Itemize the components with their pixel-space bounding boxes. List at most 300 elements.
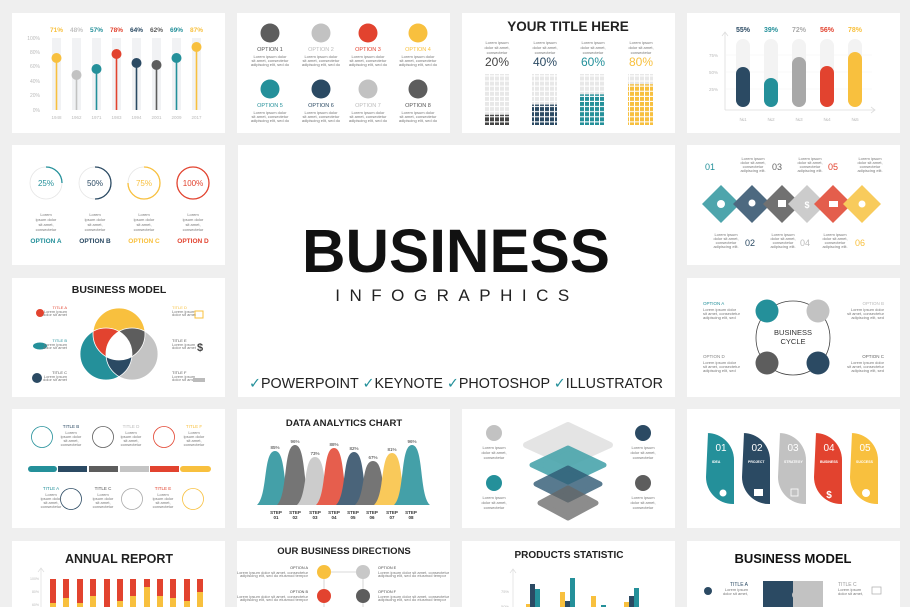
panel: business directions: Lorem ipsum dolor sit amet, consectetur — [378, 594, 450, 599]
panel: pill steps: 04 — [823, 443, 835, 454]
panel: data analytics chart: 67% — [368, 455, 378, 460]
panel: progress circles: 50% — [87, 179, 103, 188]
panel: business model venn: dolor sit amet — [172, 312, 197, 317]
panel: diamond steps: 01 — [705, 162, 715, 172]
panel: waffle percentages — [462, 13, 675, 133]
panel: diamond steps: 05 — [828, 162, 838, 172]
panel: progress circles: 25% — [38, 179, 54, 188]
panel: data analytics chart: STEP — [270, 510, 282, 515]
panel: timeline: consectetur — [41, 504, 62, 509]
panel: pill steps: 01 — [715, 443, 727, 454]
panel: options grid: OPTION 1 — [257, 47, 283, 53]
panel: waffle percentages: Lorem ipsum — [533, 40, 557, 45]
panel: diamond steps: consectetur — [716, 240, 737, 245]
panel: timeline: consectetur — [61, 442, 82, 447]
panel: pill steps: PROJECT — [748, 460, 765, 464]
panel: diamond steps: adipiscing elit. — [713, 244, 739, 249]
panel: lollipop chart: 1971 — [91, 115, 102, 120]
panel: timeline: sit amet, — [155, 500, 171, 505]
panel: progress circles — [12, 145, 225, 265]
panel: data analytics chart: 81% — [387, 447, 397, 452]
panel: timeline: ipsum dolor — [41, 496, 62, 501]
panel: pill steps: $ — [826, 490, 832, 501]
panel: progress circles: OPTION C — [128, 238, 160, 245]
panel: business cycle: sit amet, consectetur — [847, 311, 885, 316]
panel: timeline: Lorem — [97, 492, 109, 497]
panel: business model venn: TITLE B — [52, 338, 67, 343]
panel: rounded bar chart: 55% — [736, 27, 751, 34]
panel: annual report — [12, 541, 225, 607]
panel: timeline: sit amet, — [43, 500, 59, 505]
panel: data analytics chart: 01 — [273, 515, 279, 520]
panel: progress circles: consectetur — [85, 227, 106, 232]
panel: options grid: adipiscing elit, sed do — [302, 118, 341, 123]
panel: business cycle: OPTION D — [703, 354, 726, 359]
panel: business directions: adipiscing elit, sed do eiusmod tempor — [378, 597, 447, 602]
panel: diamond steps: Lorem ipsum — [823, 232, 847, 237]
panel: business model venn: $ — [197, 342, 203, 354]
panel: diamond steps: consectetur — [743, 164, 764, 169]
panel: rounded bar chart: 25% — [709, 87, 718, 92]
panel: waffle percentages: consectetur — [583, 50, 604, 55]
panel: options grid: OPTION 8 — [405, 103, 431, 109]
panel: data analytics chart: 96% — [407, 439, 417, 444]
panel: diamond steps: consectetur — [860, 164, 881, 169]
panel: data analytics chart: STEP — [366, 510, 378, 515]
panel: business model venn: Lorem ipsum — [44, 342, 68, 347]
panel: waffle percentages: consectetur — [631, 50, 652, 55]
panel: layers: consectetur — [484, 505, 505, 510]
panel: options grid: sit amet, consectetur — [350, 114, 387, 119]
panel: data analytics chart: 04 — [331, 515, 337, 520]
panel: business model venn: dolor sit amet — [172, 377, 197, 382]
panel: data analytics chart: STEP — [309, 510, 321, 515]
panel: options grid: adipiscing elit, sed do — [251, 118, 290, 123]
panel: diamond steps: dolor sit amet, — [740, 160, 766, 165]
panel: progress circles: OPTION A — [30, 238, 62, 245]
panel: diamond steps: Lorem ipsum — [798, 156, 822, 161]
panel: progress circles: Lorem — [138, 212, 150, 217]
panel: waffle percentages: consectetur — [487, 50, 508, 55]
panel: business cycle: adipiscing elit, sed — [703, 315, 736, 320]
panel: data analytics chart: 02 — [292, 515, 298, 520]
panel: progress circles: 75% — [136, 179, 152, 188]
panel: progress circles: consectetur — [36, 227, 57, 232]
panel: diamond steps: Lorem ipsum — [858, 156, 882, 161]
panel: rounded bar chart: 78% — [848, 27, 863, 34]
panel: diamond steps: consectetur — [773, 240, 794, 245]
panel: diamond steps: adipiscing elit. — [857, 168, 883, 173]
panel: progress circles: sit amet, — [38, 222, 54, 227]
subtitle: INFOGRAPHICS — [335, 286, 579, 305]
panel: options grid: Lorem ipsum dolor — [304, 54, 338, 59]
panel: diamond steps: dolor sit amet, — [797, 160, 823, 165]
panel: timeline: ipsum dolor — [153, 496, 174, 501]
panel: progress circles: Lorem — [89, 212, 101, 217]
panel: waffle percentages: 40% — [533, 55, 557, 69]
panel: progress circles: sit amet, — [87, 222, 103, 227]
panel: diamond steps: adipiscing elit. — [797, 168, 823, 173]
panel: business directions: OPTION E — [378, 566, 397, 570]
panel: progress circles: consectetur — [134, 227, 155, 232]
panel: diamond steps: 04 — [800, 238, 810, 248]
panel: progress circles: ipsum dolor — [183, 217, 204, 222]
panel: options grid: Lorem ipsum dolor — [351, 110, 385, 115]
panel: layers — [462, 409, 675, 528]
panel: business model venn: Lorem ipsum — [172, 342, 196, 347]
panel: diamond steps: dolor sit amet, — [857, 160, 883, 165]
panel: data analytics chart: STEP — [328, 510, 340, 515]
panel: business directions: adipiscing elit, sed do eiusmod tempor — [240, 573, 309, 578]
panel: diamond steps — [687, 145, 900, 265]
panel: timeline: Lorem — [157, 492, 169, 497]
panel: options grid: sit amet, consectetur — [400, 58, 437, 63]
panel: progress circles: OPTION D — [177, 238, 209, 245]
panel: diamond steps: adipiscing elit. — [822, 244, 848, 249]
panel: progress circles: ipsum dolor — [85, 217, 106, 222]
panel: layers: Lorem ipsum — [482, 445, 506, 450]
panel: business model puzzle: Lorem ipsum — [725, 587, 749, 592]
panel: options grid: sit amet, consectetur — [350, 58, 387, 63]
panel: waffle percentages: 60% — [581, 55, 605, 69]
panel: business cycle: Lorem ipsum dolor — [703, 360, 737, 365]
panel: waffle percentages: dolor sit amet, — [580, 45, 606, 50]
panel: progress circles: Lorem — [187, 212, 199, 217]
panel: timeline: TITLE B — [63, 424, 79, 429]
panel: lollipop chart: 87% — [190, 27, 203, 34]
panel: business directions: Lorem ipsum dolor sit amet, consectetur — [237, 570, 309, 575]
panel: business model venn: dolor sit amet — [43, 377, 68, 382]
panel: data analytics chart: STEP — [289, 510, 301, 515]
panel: data analytics chart: STEP — [405, 510, 417, 515]
panel: timeline: ipsum dolor — [93, 496, 114, 501]
panel: rounded bar chart: №4 — [823, 117, 831, 122]
panel: business cycle: OPTION B — [862, 301, 884, 306]
panel: options grid: adipiscing elit, sed do — [399, 118, 438, 123]
panel: lollipop chart: 1962 — [71, 115, 82, 120]
panel: lollipop chart: 2001 — [151, 115, 162, 120]
panel: options grid: Lorem ipsum dolor — [401, 110, 435, 115]
panel: progress circles: sit amet, — [136, 222, 152, 227]
panel: options grid: Lorem ipsum dolor — [401, 54, 435, 59]
panel: lollipop chart: 1994 — [131, 115, 142, 120]
panel: business model venn — [12, 278, 225, 397]
panel: data analytics chart: 73% — [310, 451, 320, 456]
panel: progress circles: Lorem — [40, 212, 52, 217]
panel: business model venn: TITLE D — [172, 305, 187, 310]
panel: annual report: 60% — [32, 603, 39, 607]
panel: business model puzzle — [687, 541, 900, 607]
panel: rounded bar chart: 50% — [709, 70, 718, 75]
panel: waffle percentages: Lorem ipsum — [581, 40, 605, 45]
panel: pill steps: 03 — [787, 443, 799, 454]
panel: lollipop chart: 71% — [50, 27, 63, 34]
panel: options grid: adipiscing elit, sed do — [251, 62, 290, 67]
panel: business model venn: TITLE E — [172, 338, 187, 343]
panel: layers: consectetur — [633, 455, 654, 460]
panel: business model venn: Lorem ipsum — [44, 309, 68, 314]
title: BUSINESS — [302, 217, 610, 285]
panel: options grid: OPTION 3 — [355, 47, 381, 53]
panel: timeline: TITLE A — [43, 486, 59, 491]
panel: timeline: sit amet, — [95, 500, 111, 505]
panel: business directions: adipiscing elit, sed do eiusmod tempor — [240, 597, 309, 602]
panel: lollipop chart: 2009 — [171, 115, 182, 120]
panel: business model venn: dolor sit amet — [43, 312, 68, 317]
panel: data analytics chart: DATA ANALYTICS CHART — [286, 418, 402, 429]
panel: annual report: ANNUAL REPORT — [65, 552, 173, 566]
panel: business cycle: sit amet, consectetur — [847, 364, 885, 369]
panel: rounded bar chart: 72% — [792, 27, 807, 34]
panel: layers: consectetur — [633, 505, 654, 510]
panel: business cycle: sit amet, consectetur — [703, 311, 741, 316]
panel: data analytics chart: 03 — [312, 515, 318, 520]
panel: rounded bar chart: 39% — [764, 27, 779, 34]
panel: options grid: sit amet, consectetur — [252, 58, 289, 63]
panel: timeline: Lorem — [65, 430, 77, 435]
panel: timeline: Lorem — [125, 430, 137, 435]
panel: options grid: Lorem ipsum dolor — [253, 110, 287, 115]
panel: rounded bar chart: №3 — [795, 117, 803, 122]
panel: business cycle: OPTION A — [703, 301, 724, 306]
panel: timeline: sit amet, — [186, 438, 202, 443]
panel: options grid: Lorem ipsum dolor — [351, 54, 385, 59]
panel: annual report: 100% — [30, 577, 39, 581]
panel: business cycle: adipiscing elit, sed — [703, 368, 736, 373]
panel: rounded bar chart: 75% — [709, 53, 718, 58]
panel: layers: Lorem ipsum — [631, 495, 655, 500]
panel: layers: Lorem ipsum — [482, 495, 506, 500]
panel: lollipop chart: 57% — [90, 27, 103, 34]
panel: business model venn: Lorem ipsum — [172, 374, 196, 379]
panel: lollipop chart: 78% — [110, 27, 123, 34]
panel: business directions — [237, 541, 450, 607]
panel: lollipop chart: 62% — [150, 27, 163, 34]
panel: pill steps: STRATEGY — [784, 460, 803, 464]
software list: ✓POWERPOINT ✓KEYNOTE ✓PHOTOSHOP ✓ILLUSTRATOR — [249, 376, 663, 392]
panel: business model venn: Lorem ipsum — [172, 309, 196, 314]
panel: progress circles: ipsum dolor — [36, 217, 57, 222]
panel: diamond steps: dolor sit amet, — [713, 236, 739, 241]
panel: timeline: TITLE F — [186, 424, 202, 429]
panel: timeline: TITLE E — [155, 486, 171, 491]
panel: business model venn: Lorem ipsum — [44, 374, 68, 379]
panel: diamond steps: 02 — [745, 238, 755, 248]
panel: data analytics chart: 85% — [270, 445, 280, 450]
panel: diamond steps: adipiscing elit. — [770, 244, 796, 249]
panel: business cycle: OPTION C — [862, 354, 885, 359]
panel: waffle percentages: Lorem ipsum — [629, 40, 653, 45]
panel: diamond steps: dolor sit amet, — [770, 236, 796, 241]
panel: business cycle: adipiscing elit, sed — [851, 315, 884, 320]
panel: diamond steps: Lorem ipsum — [714, 232, 738, 237]
panel: rounded bar chart: №2 — [767, 117, 775, 122]
panel: options grid: OPTION 7 — [355, 103, 381, 109]
panel: products statistic — [462, 541, 675, 607]
panel: lollipop chart — [12, 13, 225, 133]
panel: data analytics chart: STEP — [386, 510, 398, 515]
panel: timeline: consectetur — [121, 442, 142, 447]
panel: data analytics chart: 05 — [350, 515, 356, 520]
panel: progress circles: 100% — [183, 179, 203, 188]
panel: timeline: consectetur — [184, 442, 205, 447]
panel: rounded bar chart: 56% — [820, 27, 835, 34]
panel: data analytics chart: 07 — [389, 515, 395, 520]
panel: timeline: Lorem — [45, 492, 57, 497]
panel: business cycle: adipiscing elit, sed — [851, 368, 884, 373]
panel: waffle percentages: dolor sit amet, — [484, 45, 510, 50]
panel: diamond steps: consectetur — [825, 240, 846, 245]
panel: pill steps: BUSINESS — [820, 460, 839, 464]
panel: business model puzzle: Lorem ipsum — [838, 587, 862, 592]
panel: pill steps: SUCCESS — [856, 460, 874, 464]
panel: business directions: OUR BUSINESS DIRECTIONS — [277, 546, 411, 557]
panel: timeline: ipsum dolor — [121, 434, 142, 439]
panel: timeline: consectetur — [93, 504, 114, 509]
panel: lollipop chart: 20% — [30, 93, 41, 99]
panel: options grid: sit amet, consectetur — [303, 114, 340, 119]
panel: waffle percentages: 80% — [629, 55, 653, 69]
panel: diamond steps: 03 — [772, 162, 782, 172]
panel: layers: Lorem ipsum — [631, 445, 655, 450]
panel: lollipop chart: 100% — [27, 36, 41, 42]
panel: rounded bar chart: №1 — [739, 117, 747, 122]
panel: annual report: 80% — [32, 590, 39, 594]
panel: diamond steps: Lorem ipsum — [771, 232, 795, 237]
panel: business cycle: Lorem ipsum dolor — [851, 307, 885, 312]
panel: timeline: TITLE C — [95, 486, 112, 491]
panel: business model venn: TITLE F — [172, 370, 187, 375]
panel: options grid: adipiscing elit, sed do — [302, 62, 341, 67]
panel: pill steps: 05 — [859, 443, 871, 454]
panel: options grid: OPTION 5 — [257, 103, 283, 109]
panel: layers: dolor sit amet, — [630, 450, 656, 455]
panel: center title — [238, 145, 675, 397]
panel: lollipop chart: 60% — [30, 64, 41, 70]
panel: options grid: sit amet, consectetur — [303, 58, 340, 63]
panel: lollipop chart: 48% — [70, 27, 83, 34]
panel: pill steps: 02 — [751, 443, 763, 454]
panel: business model puzzle: dolor sit amet, — [723, 591, 748, 596]
panel: waffle percentages: dolor sit amet, — [532, 45, 558, 50]
panel: options grid: OPTION 6 — [308, 103, 334, 109]
panel: data analytics chart — [237, 409, 450, 528]
panel: lollipop chart: 1948 — [51, 115, 62, 120]
panel: data analytics chart: 08 — [408, 515, 414, 520]
panel: progress circles: consectetur — [183, 227, 204, 232]
panel: diamond steps: $ — [804, 200, 810, 210]
panel: products statistic: PRODUCTS STATISTIC — [514, 550, 624, 561]
panel: business cycle: Lorem ipsum dolor — [703, 307, 737, 312]
panel: progress circles: OPTION B — [79, 238, 111, 245]
panel: options grid: Lorem ipsum dolor — [253, 54, 287, 59]
panel: data analytics chart: 82% — [349, 446, 359, 451]
panel: diamond steps: 06 — [855, 238, 865, 248]
panel: pill steps: IDEA — [712, 460, 721, 464]
panel: diamond steps: consectetur — [800, 164, 821, 169]
panel: business directions: OPTION F — [378, 590, 397, 594]
panel: business directions: Lorem ipsum dolor sit amet, consectetur — [237, 594, 309, 599]
panel: lollipop chart: 80% — [30, 50, 41, 56]
panel: timeline: sit amet, — [123, 438, 139, 443]
panel: options grid: adipiscing elit, sed do — [349, 62, 388, 67]
panel: options grid: sit amet, consectetur — [400, 114, 437, 119]
panel: lollipop chart: 2017 — [191, 115, 202, 120]
panel: layers: dolor sit amet, — [630, 500, 656, 505]
panel: options grid: OPTION 4 — [405, 47, 431, 53]
panel: products statistic: 75% — [501, 589, 509, 594]
panel: timeline — [12, 409, 225, 528]
panel: business model puzzle: TITLE C — [838, 582, 857, 588]
panel: business directions: adipiscing elit, sed do eiusmod tempor — [378, 573, 447, 578]
panel: pill steps — [687, 409, 900, 528]
panel: waffle percentages: consectetur — [535, 50, 556, 55]
panel: timeline: ipsum dolor — [184, 434, 205, 439]
panel: progress circles: ipsum dolor — [134, 217, 155, 222]
panel: rounded bar chart — [687, 13, 900, 133]
panel: business model puzzle: TITLE A — [730, 582, 749, 588]
panel: options grid: sit amet, consectetur — [252, 114, 289, 119]
panel: diamond steps: Lorem ipsum — [741, 156, 765, 161]
panel: options grid: OPTION 2 — [308, 47, 334, 53]
panel: lollipop chart: 1983 — [111, 115, 122, 120]
panel: business cycle: Lorem ipsum dolor — [851, 360, 885, 365]
panel: options grid: Lorem ipsum dolor — [304, 110, 338, 115]
panel: business directions: OPTION A — [290, 566, 308, 570]
panel: progress circles: sit amet, — [185, 222, 201, 227]
panel: business cycle: BUSINESS — [774, 328, 812, 337]
panel: timeline: sit amet, — [63, 438, 79, 443]
panel: business model venn: BUSINESS MODEL — [72, 284, 167, 296]
panel: options grid: adipiscing elit, sed do — [399, 62, 438, 67]
panel: layers: dolor sit amet, — [481, 450, 507, 455]
panel: business model puzzle: BUSINESS MODEL — [734, 551, 852, 566]
panel: lollipop chart: 40% — [30, 79, 41, 85]
panel: lollipop chart: 0% — [33, 108, 41, 114]
panel: business cycle: CYCLE — [780, 337, 806, 346]
panel: rounded bar chart: №5 — [851, 117, 859, 122]
panel: business model venn: TITLE C — [52, 370, 67, 375]
panel: timeline: Lorem — [188, 430, 200, 435]
panel: data analytics chart: STEP — [347, 510, 359, 515]
panel: waffle percentages: dolor sit amet, — [628, 45, 654, 50]
panel: options grid: adipiscing elit, sed do — [349, 118, 388, 123]
panel: layers: consectetur — [484, 455, 505, 460]
panel: data analytics chart: 06 — [369, 515, 375, 520]
panel: business model venn: TITLE A — [53, 305, 67, 310]
panel: waffle percentages: 20% — [485, 55, 509, 69]
panel: timeline: consectetur — [153, 504, 174, 509]
panel: business cycle: sit amet, consectetur — [703, 364, 741, 369]
panel: business model puzzle: dolor sit amet, — [838, 591, 863, 596]
panel: layers: dolor sit amet, — [481, 500, 507, 505]
panel: data analytics chart: 96% — [290, 439, 300, 444]
panel: business model venn: dolor sit amet — [43, 345, 68, 350]
panel: business cycle — [687, 278, 900, 397]
panel: business directions: Lorem ipsum dolor sit amet, consectetur — [378, 570, 450, 575]
panel: business directions: OPTION B — [290, 590, 308, 594]
panel: lollipop chart: 64% — [130, 27, 143, 34]
panel: diamond steps: adipiscing elit. — [740, 168, 766, 173]
panel: data analytics chart: 88% — [329, 442, 339, 447]
panel: options grid — [237, 13, 450, 133]
panel: timeline: TITLE D — [123, 424, 140, 429]
panel: waffle percentages: YOUR TITLE HERE — [507, 19, 629, 34]
panel: business model venn: dolor sit amet — [172, 345, 197, 350]
panel: waffle percentages: Lorem ipsum — [485, 40, 509, 45]
panel: timeline: ipsum dolor — [61, 434, 82, 439]
panel: lollipop chart: 69% — [170, 27, 183, 34]
